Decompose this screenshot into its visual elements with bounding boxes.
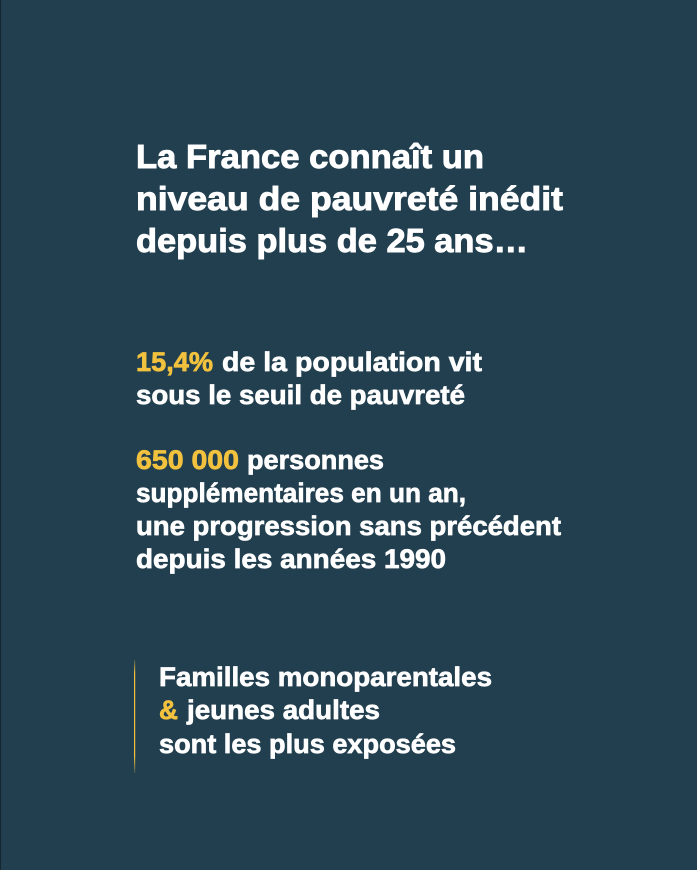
statistic: 650 000 additional people: personnes xyxy=(247,445,384,475)
callout: most exposed groups: jeunes adultes xyxy=(186,695,380,725)
statistic: 15,4% of the population: 15,4% xyxy=(136,347,213,377)
statistic: 15,4% of the population xyxy=(136,347,482,410)
callout: most exposed groups: Familles monoparentales xyxy=(159,662,492,692)
callout: most exposed groups: sont les plus exposées xyxy=(159,729,456,759)
title: La France connaît un xyxy=(136,138,484,175)
statistic: 650 000 additional people: 650 000 xyxy=(136,445,239,475)
statistic: 650 000 additional people: une progression sans précédent xyxy=(136,511,561,541)
title: depuis plus de 25 ans… xyxy=(136,222,528,259)
statistic: 650 000 additional people: supplémentaires en un an, xyxy=(136,478,466,508)
statistic: 650 000 additional people: depuis les années 1990 xyxy=(136,544,446,574)
statistic: 15,4% of the population: sous le seuil de pauvreté xyxy=(136,380,465,410)
statistic: 15,4% of the population: de la population vit xyxy=(222,347,482,377)
statistic: 650 000 additional people xyxy=(136,445,561,574)
title xyxy=(136,138,563,259)
callout accent line xyxy=(134,660,135,773)
callout: most exposed groups: & xyxy=(159,695,178,725)
callout: most exposed groups xyxy=(159,662,492,759)
title: niveau de pauvreté inédit xyxy=(136,180,563,217)
